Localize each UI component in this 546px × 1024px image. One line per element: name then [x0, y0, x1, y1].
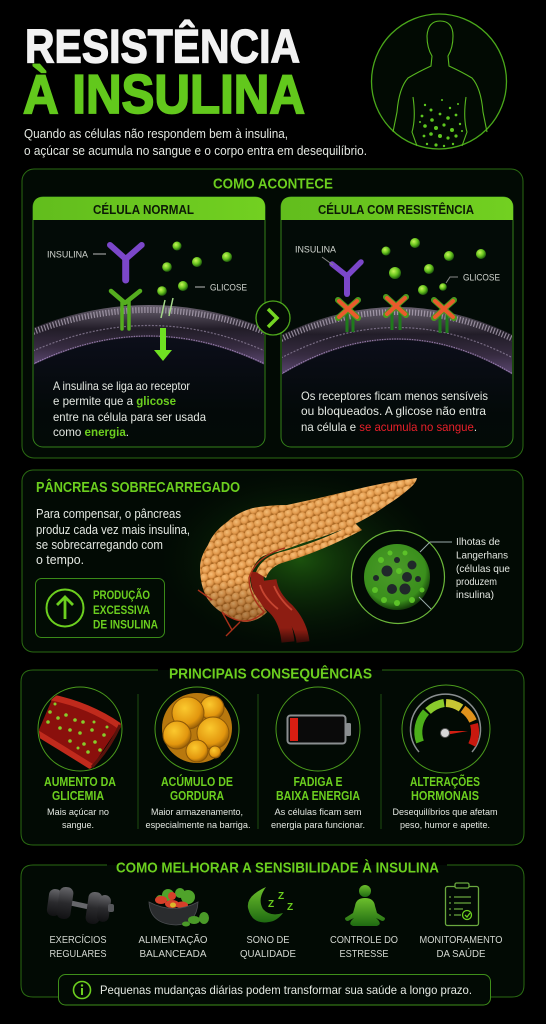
arrow: glucose entering	[154, 298, 173, 361]
label: ilhotas: insulina)	[456, 589, 494, 601]
item: alimentação	[138, 888, 209, 960]
item: alterações hormonais: HORMONAIS	[411, 789, 479, 803]
item: monitoramento: DA SAÚDE	[436, 947, 486, 960]
label: insulina: INSULINA	[47, 250, 89, 260]
item: acúmulo de gordura: GORDURA	[170, 789, 224, 803]
item: fadiga e baixa energia: energia para funcionar.	[271, 820, 365, 831]
icon: dumbbell	[46, 886, 114, 925]
label: glicose: GLICOSE	[463, 272, 500, 284]
body text: produz cada vez mais insulina,	[36, 523, 190, 537]
panel: principais consequências	[21, 664, 524, 845]
title: RESISTÊNCIA	[25, 20, 300, 72]
item: fadiga e baixa energia: As células ficam sem	[274, 807, 362, 818]
item: monitoramento: MONITORAMENTO	[420, 934, 502, 946]
icon: moon and z: Z	[278, 891, 284, 902]
text: normal: entre na célula para ser usada	[53, 410, 206, 424]
callout: pequenas mudanças: Pequenas mudanças diárias podem transformar sua saúde a longo prazo.	[100, 983, 472, 997]
callout: produção excessiva: PRODUÇÃO	[93, 589, 150, 602]
icon: moon and z	[248, 887, 293, 922]
arrow: transition between cards	[256, 301, 290, 335]
label: glicose	[195, 282, 247, 294]
card: célula normal: CÉLULA NORMAL	[93, 202, 194, 217]
label: ilhotas: (células que	[456, 563, 510, 575]
text: normal: como energia.	[53, 425, 129, 439]
icon: salad bowl	[149, 888, 209, 926]
item: acúmulo de gordura: ACÚMULO DE	[161, 774, 233, 789]
item: alterações hormonais: ALTERAÇÕES	[410, 774, 480, 789]
card: célula normal	[33, 197, 265, 447]
label: ilhotas	[456, 536, 510, 601]
item: sono	[240, 887, 296, 960]
heading: PRINCIPAIS CONSEQUÊNCIAS	[169, 664, 372, 682]
label: ilhotas: Ilhotas de	[456, 536, 500, 548]
panel: pâncreas sobrecarregado	[22, 470, 523, 652]
icon: moon and z: Z	[287, 902, 293, 913]
item: fadiga e baixa energia	[271, 687, 365, 831]
item: monitoramento	[420, 883, 502, 960]
inset: ilhotas de langerhans	[352, 530, 452, 624]
illustration: fat cells	[162, 693, 232, 763]
receptor	[111, 291, 140, 329]
icon: gauge	[410, 694, 480, 752]
item: alimentação: ALIMENTAÇÃO	[138, 933, 208, 946]
item: fadiga e baixa energia: FADIGA E	[294, 775, 342, 789]
label: glicose	[446, 272, 500, 284]
callout: produção excessiva	[36, 578, 164, 638]
card: célula com resistência	[281, 197, 513, 447]
green glow	[160, 470, 440, 650]
illustration: blood vessel	[37, 697, 121, 767]
item: aumento da glicemia: GLICEMIA	[52, 789, 104, 803]
title	[23, 20, 305, 125]
insulin molecule	[332, 262, 361, 294]
item: alterações hormonais: Desequilíbrios que afetam	[392, 807, 498, 818]
panel: como melhorar	[21, 860, 524, 1005]
text: resistência: Os receptores ficam menos sensíveis	[301, 389, 488, 403]
text: normal: e permite que a glicose	[53, 394, 176, 408]
label: insulina: INSULINA	[295, 244, 337, 256]
callout: produção excessiva: EXCESSIVA	[93, 605, 150, 617]
item: exercícios	[46, 886, 114, 960]
cell membrane	[282, 307, 512, 386]
label: insulina	[295, 244, 337, 265]
text: resistência	[301, 389, 488, 434]
text: resistência: na célula e se acumula no sangue.	[301, 420, 477, 434]
item: acúmulo de gordura	[146, 687, 250, 831]
item: acúmulo de gordura: Maior armazenamento,	[151, 807, 243, 818]
item: aumento da glicemia: Mais açúcar no	[47, 807, 109, 818]
label: glicose: GLICOSE	[210, 282, 247, 294]
title: À INSULINA	[23, 63, 305, 125]
item: exercícios: REGULARES	[50, 948, 106, 960]
item: estresse	[330, 885, 398, 960]
item: alterações hormonais	[392, 685, 498, 831]
text: resistência: ou bloqueados. A glicose não entra	[301, 404, 486, 418]
label: ilhotas: produzem	[456, 576, 497, 588]
panel: como acontece	[22, 169, 523, 458]
illustration: pancreas	[198, 478, 417, 642]
card: célula com resistência: CÉLULA COM RESISTÊNCIA	[318, 202, 474, 217]
item: acúmulo de gordura: especialmente na barriga.	[146, 820, 250, 831]
subtitle	[24, 126, 367, 158]
item: aumento da glicemia: sangue.	[62, 820, 94, 831]
item: alimentação: BALANCEADA	[140, 948, 206, 960]
icon: moon and z: Z	[268, 899, 274, 910]
icon: clipboard	[446, 883, 478, 926]
item: exercícios: EXERCÍCIOS	[50, 933, 106, 946]
callout: pequenas mudanças	[58, 974, 490, 1005]
glucose molecules	[157, 242, 232, 296]
item: aumento da glicemia	[37, 687, 122, 831]
icon: low battery	[288, 716, 351, 744]
heading: COMO MELHORAR A SENSIBILIDADE À INSULINA	[116, 860, 439, 876]
item: sono: SONO DE	[246, 934, 290, 946]
body text: o tempo.	[36, 553, 84, 567]
item: alterações hormonais: peso, humor e apetite.	[400, 820, 490, 831]
icon: body silhouette with glucose	[372, 14, 506, 149]
text: normal: A insulina se liga ao receptor	[53, 379, 190, 393]
label: ilhotas: Langerhans	[456, 550, 508, 562]
icon: meditating figure	[345, 885, 385, 926]
subtitle: Quando as células não respondem bem à insulina,	[24, 126, 288, 141]
body text	[36, 507, 190, 567]
glucose molecules	[382, 238, 486, 295]
icon: info	[74, 982, 90, 998]
callout: produção excessiva: DE INSULINA	[93, 620, 158, 632]
text: normal	[53, 379, 206, 439]
cell membrane	[34, 305, 264, 384]
body text: se sobrecarregando com	[36, 538, 163, 552]
item: aumento da glicemia: AUMENTO DA	[44, 775, 116, 789]
body text: Para compensar, o pâncreas	[36, 507, 181, 521]
heading: PÂNCREAS SOBRECARREGADO	[36, 478, 240, 496]
blocked receptors	[338, 297, 454, 333]
subtitle: o açúcar se acumula no sangue e o corpo entra em desequilíbrio.	[24, 143, 367, 158]
item: estresse: ESTRESSE	[340, 948, 388, 960]
item: fadiga e baixa energia: BAIXA ENERGIA	[276, 789, 360, 803]
item: estresse: CONTROLE DO	[330, 934, 398, 946]
heading: como acontece: COMO ACONTECE	[213, 176, 333, 192]
insulin molecule	[110, 245, 142, 280]
item: sono: QUALIDADE	[240, 948, 296, 960]
